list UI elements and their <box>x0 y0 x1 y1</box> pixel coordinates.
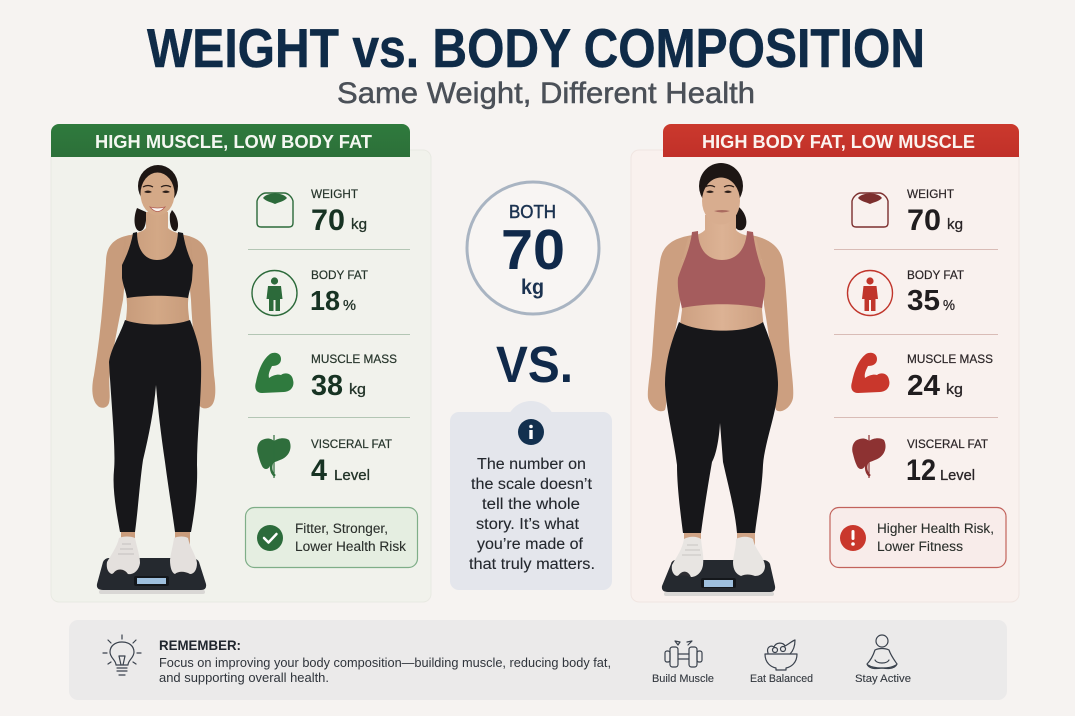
icon: liver <box>257 435 291 478</box>
panel: high body fat, low muscle <box>631 124 1019 602</box>
item: stay active <box>855 635 911 685</box>
item: eat balanced <box>750 640 813 685</box>
metric: body fat: BODY FAT <box>311 268 369 282</box>
icon: salad bowl <box>765 640 797 670</box>
badge: both 70 kg: 70 <box>501 218 565 282</box>
metric: weight: kg <box>351 216 367 233</box>
metric: muscle mass <box>255 352 397 402</box>
metric: visceral fat: Level <box>334 467 370 484</box>
remember text: and supporting overall health. <box>159 671 329 685</box>
icon: flexed arm <box>255 353 293 393</box>
scale <box>97 558 206 594</box>
metric: body fat: % <box>343 297 356 314</box>
metric: muscle mass: 24 <box>907 370 940 402</box>
metric: weight: WEIGHT <box>907 187 955 201</box>
panel header <box>663 124 1019 157</box>
metric: visceral fat <box>257 435 393 487</box>
metric: muscle mass: kg <box>349 381 366 398</box>
info note <box>450 401 612 590</box>
panel background <box>631 150 1019 602</box>
panel header <box>51 124 410 157</box>
item: eat balanced: Eat Balanced <box>750 673 813 685</box>
panel: high muscle, low body fat <box>51 124 431 602</box>
metric: weight: 70 <box>907 204 941 237</box>
metric: visceral fat: VISCERAL FAT <box>907 437 989 451</box>
icon: liver <box>852 435 886 478</box>
icon: person in circle <box>252 270 297 316</box>
callout: fitter, stronger: Lower Health Risk <box>295 539 406 554</box>
footer: remember bar <box>69 620 1007 700</box>
panel header: HIGH MUSCLE, LOW BODY FAT <box>95 132 372 152</box>
callout: fitter, stronger: Fitter, Stronger, <box>295 521 388 536</box>
metric: weight <box>852 187 963 237</box>
callout: higher health risk: Lower Fitness <box>877 539 963 554</box>
info note: The number on <box>477 456 586 473</box>
info note: you’re made of <box>477 536 584 553</box>
info note: story. It’s what <box>476 516 580 533</box>
icon: alert <box>840 525 866 551</box>
icon: info <box>518 419 544 445</box>
info note: that truly matters. <box>469 556 595 573</box>
icon: lightbulb <box>103 635 141 675</box>
title: WEIGHT vs. BODY COMPOSITION <box>147 17 925 79</box>
icon: dumbbell <box>665 641 702 667</box>
callout: fitter, stronger <box>246 508 418 568</box>
icon: flexed arm <box>851 353 889 393</box>
vs. label: VS. <box>496 336 573 393</box>
metric: weight: kg <box>947 216 963 233</box>
subtitle: Same Weight, Different Health <box>337 77 755 110</box>
metric: muscle mass: MUSCLE MASS <box>311 352 397 366</box>
metric: weight: WEIGHT <box>311 187 359 201</box>
badge: both 70 kg: kg <box>521 276 544 299</box>
figure: fit woman on scale <box>92 165 215 594</box>
metric: body fat: 18 <box>310 285 340 316</box>
info note: the scale doesn’t <box>471 476 593 493</box>
icon: scale <box>257 193 293 227</box>
badge: both 70 kg <box>467 182 599 314</box>
icon: meditation <box>867 635 897 669</box>
metric: weight <box>257 187 367 237</box>
metric: muscle mass <box>851 352 993 402</box>
remember text <box>159 656 611 685</box>
item: build muscle: Build Muscle <box>652 673 714 685</box>
metric: visceral fat: Level <box>940 467 975 484</box>
icon: scale <box>852 193 888 227</box>
icon: check <box>257 525 283 551</box>
scale <box>662 560 775 596</box>
center column <box>450 182 612 590</box>
item: stay active: Stay Active <box>855 673 911 685</box>
remember heading: REMEMBER: <box>159 637 241 653</box>
metric: visceral fat: 4 <box>311 454 327 487</box>
metric: body fat <box>848 268 965 317</box>
item: build muscle <box>652 641 714 685</box>
metric: visceral fat: 12 <box>906 454 936 487</box>
metric: visceral fat: VISCERAL FAT <box>311 437 393 451</box>
metric: muscle mass: kg <box>946 381 963 398</box>
metric: body fat: % <box>943 297 955 314</box>
metric: body fat <box>252 268 369 316</box>
callout: higher health risk: Higher Health Risk, <box>877 521 994 536</box>
metric: visceral fat <box>852 435 989 487</box>
figure: higher-fat woman on scale <box>648 163 793 596</box>
remember text: Focus on improving your body composition—building muscle, reducing body fat, <box>159 656 611 670</box>
info note: tell the whole <box>482 496 580 513</box>
panel background <box>51 150 431 602</box>
metric: muscle mass: 38 <box>311 370 343 402</box>
metric: weight: 70 <box>311 204 345 237</box>
callout: higher health risk <box>830 508 1006 568</box>
metric: body fat: 35 <box>907 285 940 317</box>
icon: person in circle <box>848 270 892 316</box>
metric: body fat: BODY FAT <box>907 268 965 282</box>
panel header: HIGH BODY FAT, LOW MUSCLE <box>702 132 975 152</box>
badge: both 70 kg: BOTH <box>509 202 556 222</box>
metric: muscle mass: MUSCLE MASS <box>907 352 993 366</box>
